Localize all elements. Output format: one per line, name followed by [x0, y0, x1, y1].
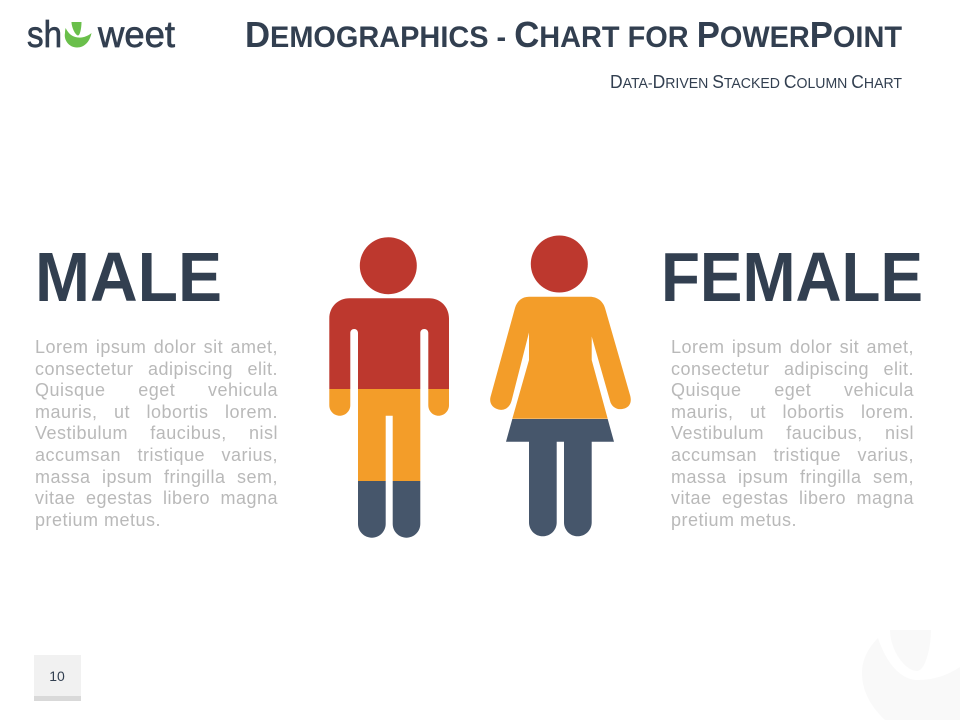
heading: male: MALE — [35, 238, 222, 316]
icon: female figure stacked column — [490, 236, 631, 536]
paragraph: male description: Quisque eget vehicula — [35, 380, 278, 400]
paragraph: male description: vitae egestas libero magna — [35, 488, 278, 508]
paragraph: male description: Lorem ipsum dolor sit amet, — [35, 337, 278, 357]
female dress and arms — [490, 297, 631, 419]
icon: logo mark — [65, 22, 92, 48]
male hips and lower arms — [329, 389, 449, 481]
paragraph: female description: Vestibulum faucibus, nisl — [671, 423, 914, 443]
female head — [531, 236, 588, 292]
watermark logo — [862, 630, 960, 720]
paragraph: male description: pretium metus. — [35, 510, 161, 530]
paragraph: female description: massa ipsum fringilla sem, — [671, 467, 914, 487]
logo: weet — [97, 14, 176, 55]
paragraph: male description: accumsan tristique varius, — [35, 445, 278, 465]
paragraph: male description: Vestibulum faucibus, nisl — [35, 423, 278, 443]
logo — [27, 14, 176, 55]
male head — [360, 237, 417, 294]
page number badge — [34, 655, 81, 701]
paragraph: female description: accumsan tristique varius, — [671, 445, 914, 465]
male torso and upper arms — [329, 298, 449, 389]
paragraph: female description: vitae egestas libero magna — [671, 488, 914, 508]
paragraph: male description: massa ipsum fringilla sem, — [35, 467, 278, 487]
paragraph: male description — [35, 337, 278, 530]
icon: male figure stacked column — [329, 237, 449, 538]
subtitle: DATA-DRIVEN STACKED COLUMN CHART — [610, 72, 902, 92]
heading: female: FEMALE — [661, 238, 923, 316]
paragraph: female description: Quisque eget vehicula — [671, 380, 914, 400]
female skirt and legs — [506, 419, 614, 536]
paragraph: female description: pretium metus. — [671, 510, 797, 530]
paragraph: female description: consectetur adipiscing elit. — [671, 359, 914, 379]
logo: sh — [27, 14, 62, 55]
page number badge: 10 — [49, 668, 65, 684]
title: DEMOGRAPHICS - CHART FOR POWERPOINT — [245, 14, 902, 55]
male lower legs — [358, 481, 420, 538]
paragraph: male description: consectetur adipiscing elit. — [35, 359, 278, 379]
paragraph: female description — [671, 337, 914, 530]
paragraph: male description: mauris, ut lobortis lorem. — [35, 402, 278, 422]
paragraph: female description: Lorem ipsum dolor sit amet, — [671, 337, 914, 357]
paragraph: female description: mauris, ut lobortis lorem. — [671, 402, 914, 422]
